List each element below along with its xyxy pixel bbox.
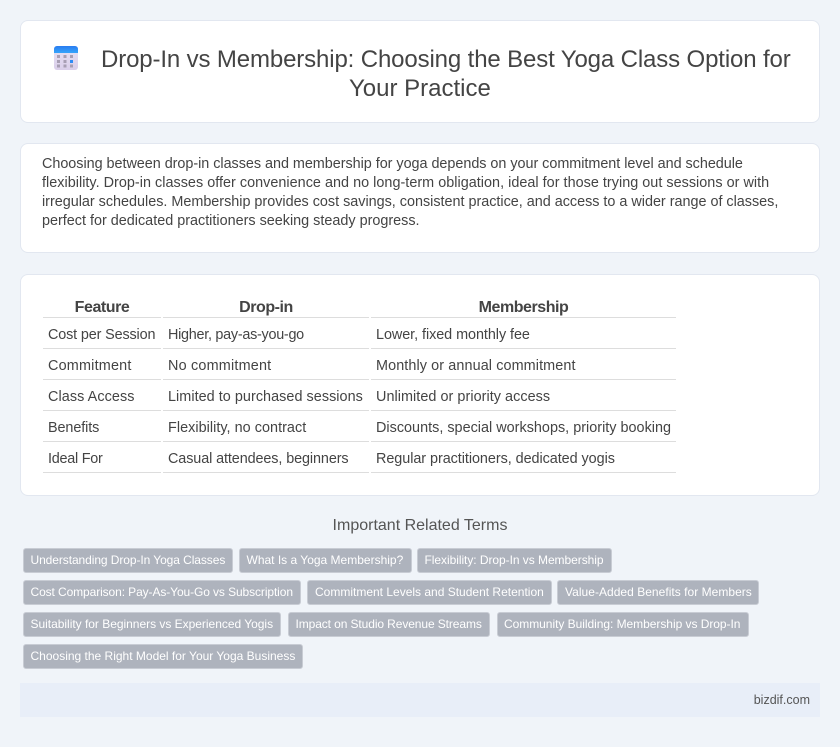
tag <box>23 548 233 573</box>
table header row: Feature <box>75 299 129 316</box>
footer credit: bizdif.com <box>754 693 810 707</box>
row: cost per session <box>43 327 676 349</box>
tag: Value-Added Benefits for Members <box>565 585 752 599</box>
intro text: Choosing between drop-in classes and membership for yoga depends on your commitment level and schedule <box>42 156 743 172</box>
tag <box>557 580 759 605</box>
intro text: perfect for dedicated practitioners seeking steady progress. <box>42 213 420 229</box>
table card <box>20 274 820 496</box>
title <box>101 46 791 102</box>
title: Your Practice <box>349 75 491 102</box>
row: class access: Limited to purchased sessions <box>168 389 363 405</box>
row: benefits <box>43 420 676 442</box>
tag <box>307 580 552 605</box>
row: benefits: Benefits <box>48 420 99 436</box>
row: ideal for: Casual attendees, beginners <box>168 451 349 467</box>
tag: Suitability for Beginners vs Experienced Yogis <box>30 617 273 631</box>
row: ideal for <box>43 451 676 473</box>
tag: Flexibility: Drop-In vs Membership <box>424 553 604 567</box>
intro card <box>20 143 820 253</box>
intro text <box>42 156 778 229</box>
row: class access: Unlimited or priority access <box>376 389 550 405</box>
row: commitment <box>43 358 676 380</box>
row: benefits: Discounts, special workshops, priority booking <box>376 420 671 436</box>
header card <box>20 20 820 123</box>
tag: Choosing the Right Model for Your Yoga Business <box>30 649 295 663</box>
row: commitment: No commitment <box>168 358 271 374</box>
comparison table <box>43 299 676 473</box>
title: Drop-In vs Membership: Choosing the Best Yoga Class Option for <box>101 46 791 73</box>
row: ideal for: Regular practitioners, dedicated yogis <box>376 451 615 467</box>
table header row: Membership <box>479 299 568 316</box>
table header row: Drop-in <box>239 299 293 316</box>
tag <box>497 612 749 637</box>
intro text: flexibility. Drop-in classes offer convenience and no long-term obligation, ideal for those trying out sessions or with <box>42 175 769 191</box>
row: ideal for: Ideal For <box>48 451 103 467</box>
row: class access: Class Access <box>48 389 135 405</box>
tag: What Is a Yoga Membership? <box>246 553 403 567</box>
related term tags <box>23 548 759 669</box>
icon: calendar <box>54 46 78 70</box>
tag: Commitment Levels and Student Retention <box>315 585 544 599</box>
tag <box>23 580 301 605</box>
footer bar <box>20 683 820 717</box>
table header row <box>43 299 676 318</box>
row: cost per session: Cost per Session <box>48 327 155 343</box>
row: commitment: Commitment <box>48 358 132 374</box>
row: class access <box>43 389 676 411</box>
tag: Cost Comparison: Pay-As-You-Go vs Subscription <box>30 585 293 599</box>
tag <box>23 644 303 669</box>
row: commitment: Monthly or annual commitment <box>376 358 576 374</box>
tag: Impact on Studio Revenue Streams <box>296 617 482 631</box>
row: cost per session: Lower, fixed monthly fee <box>376 327 530 343</box>
related terms heading: Important Related Terms <box>333 517 507 534</box>
tag <box>23 612 281 637</box>
tag: Understanding Drop-In Yoga Classes <box>30 553 225 567</box>
tag <box>417 548 612 573</box>
row: cost per session: Higher, pay-as-you-go <box>168 327 304 343</box>
intro text: irregular schedules. Membership provides cost savings, consistent practice, and access to a wider range of classes, <box>42 194 778 210</box>
tag <box>288 612 490 637</box>
tag <box>239 548 412 573</box>
row: benefits: Flexibility, no contract <box>168 420 306 436</box>
tag: Community Building: Membership vs Drop-In <box>504 617 740 631</box>
